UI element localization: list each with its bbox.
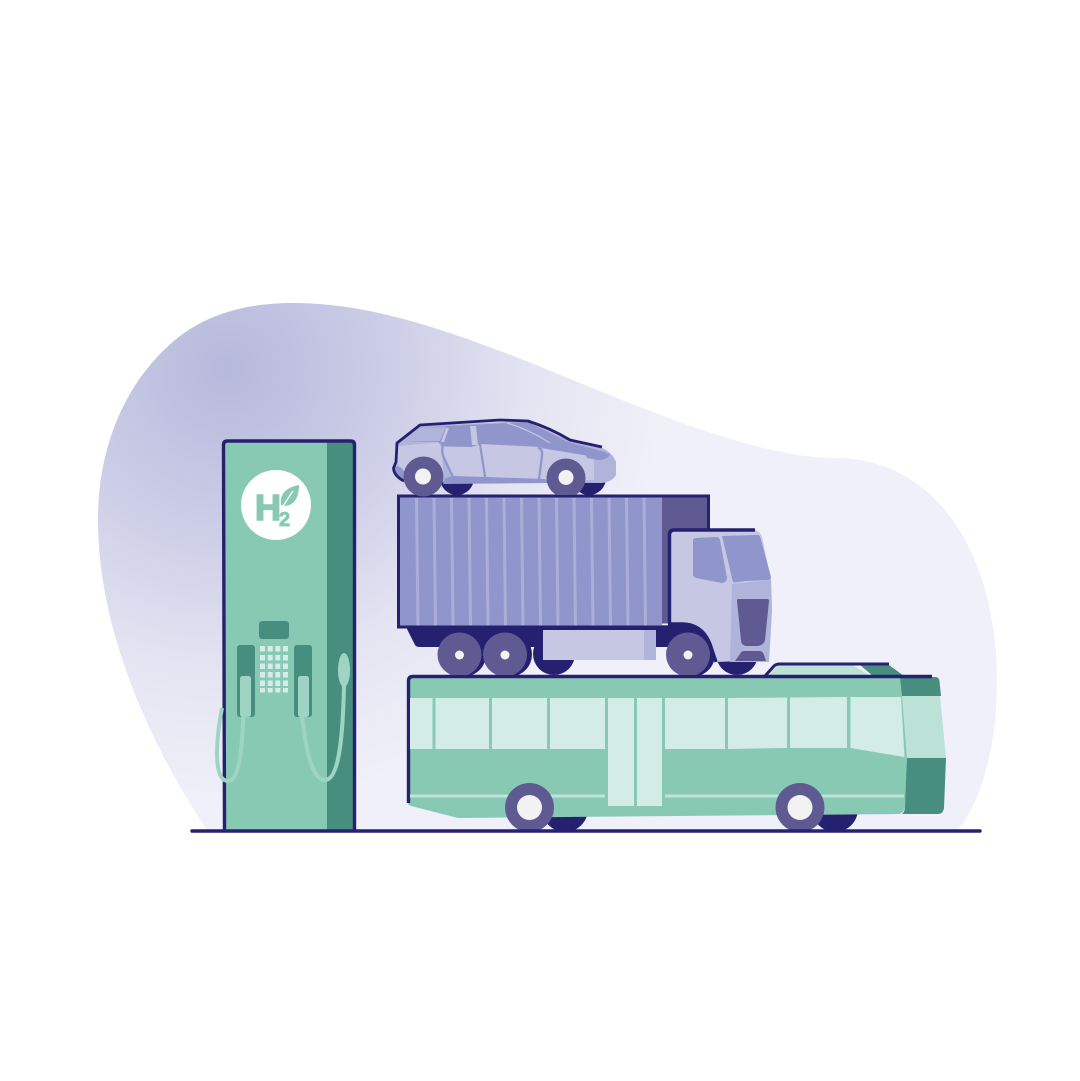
hydrogen pump — [217, 441, 355, 831]
container dark end — [662, 496, 708, 624]
cab windscreen — [722, 535, 771, 582]
bus roof unit — [765, 664, 904, 676]
truck cab — [669, 530, 772, 662]
bus rear wheel — [505, 783, 554, 832]
car rear wheel — [404, 456, 444, 496]
bus front upper dark panel — [900, 677, 941, 696]
cab grille — [737, 599, 769, 646]
H2 logo: 2 — [279, 509, 290, 531]
bus — [408, 664, 946, 832]
container outline — [398, 496, 708, 627]
car far wheels — [442, 482, 606, 494]
cab wheel arch — [668, 624, 716, 662]
H2 logo — [241, 470, 311, 540]
truck far wheels — [468, 647, 756, 675]
car front wheel — [546, 458, 586, 498]
bus rear-side wheel shadows — [548, 814, 858, 830]
left cable — [217, 708, 244, 781]
cab side window — [693, 537, 727, 583]
car front door — [481, 444, 542, 479]
bus body — [408, 677, 908, 818]
truck — [398, 496, 772, 676]
right nozzle holder — [294, 645, 312, 717]
truck rear wheel 2 — [483, 632, 527, 676]
car rear quarter — [396, 442, 444, 478]
keypad — [260, 646, 288, 692]
right cable — [302, 686, 344, 780]
hanging nozzle — [338, 653, 350, 687]
bus front lower dark panel — [902, 758, 946, 814]
truck container — [399, 496, 662, 626]
bus side stripes — [410, 794, 904, 798]
bus windows — [410, 697, 904, 757]
car rear glass highlight — [405, 427, 446, 442]
car rear door — [443, 444, 484, 477]
pump dark side panel — [327, 442, 354, 831]
bus doors — [608, 698, 662, 806]
cab outline — [670, 530, 755, 623]
car hood side — [539, 448, 594, 480]
left nozzle — [240, 676, 251, 717]
cab front face — [730, 580, 772, 662]
pump outline — [224, 441, 354, 831]
cab headlight panel — [735, 651, 766, 661]
bus windscreen — [902, 696, 946, 758]
car sill — [443, 476, 550, 484]
container ribs — [416, 498, 646, 626]
truck chassis — [406, 625, 716, 647]
bus front wheel — [776, 783, 824, 832]
car body — [394, 421, 616, 483]
car glasshouse — [405, 422, 608, 459]
car door lines — [442, 444, 590, 479]
truck rear wheel 1 — [438, 632, 482, 676]
car bumper light — [585, 453, 610, 460]
car — [394, 420, 616, 498]
pump body — [223, 441, 355, 831]
left nozzle holder — [237, 645, 255, 717]
H2 logo: H — [255, 487, 281, 528]
bus outline — [408, 676, 932, 803]
car rear lower panel — [394, 466, 405, 482]
car outline — [394, 420, 602, 481]
background blob — [98, 303, 997, 830]
pump display — [259, 621, 289, 639]
right nozzle — [298, 676, 309, 717]
truck fuel tank — [543, 630, 656, 660]
car roof highlight — [507, 423, 550, 443]
car window pillars — [441, 426, 478, 445]
truck front wheel — [666, 632, 710, 676]
ground line — [192, 829, 980, 833]
